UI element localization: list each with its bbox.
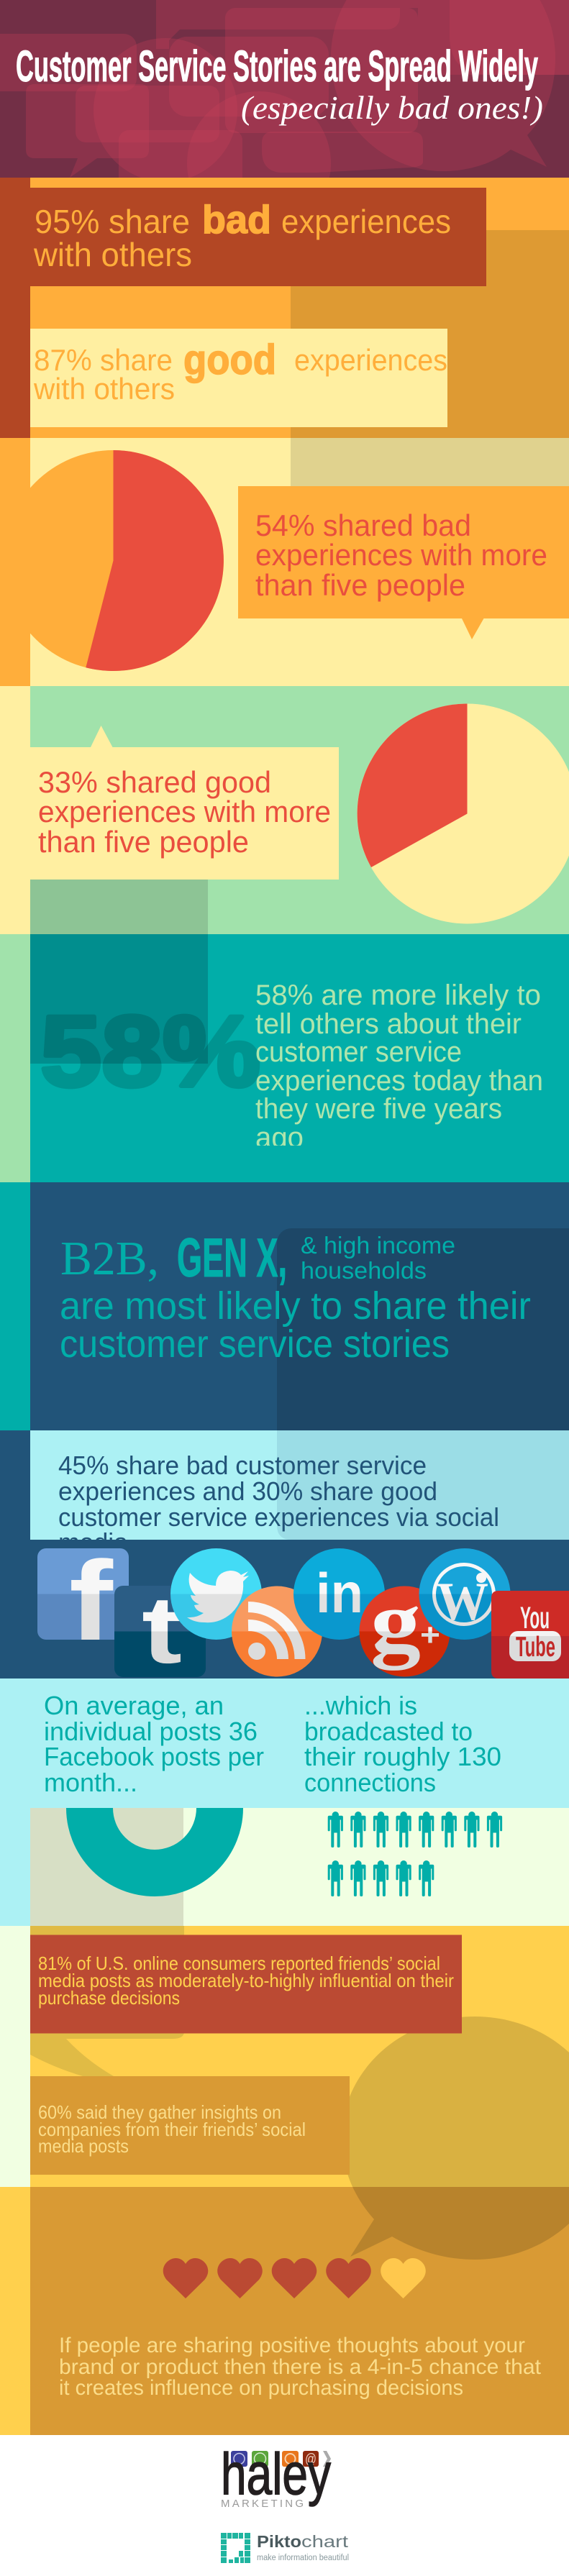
text: 45% and 30%: customer service experiences via social — [58, 1502, 499, 1532]
callout: 60%: companies from their friends’ social — [38, 2119, 306, 2140]
text: 58% description: customer service — [255, 1036, 462, 1068]
callout: 95% share bad: experiences — [281, 203, 451, 240]
text: 130 connections — [304, 1691, 501, 1797]
panel: 45% via social media — [0, 1430, 569, 1684]
callout: 87% share good: 87% share — [34, 343, 173, 377]
callout: 54% text: experiences with more — [255, 538, 547, 572]
text: 4-in-5 chance: brand or product then there is a 4-in-5 chance that — [59, 2355, 542, 2379]
panel: share bad and good experiences — [0, 178, 569, 438]
logo: piktochart — [221, 2532, 349, 2563]
text: most likely to share — [60, 1284, 531, 1366]
panel: 58% more likely — [0, 934, 569, 1182]
callout: 60% — [30, 2076, 350, 2175]
text: 58% description: they were five years — [255, 1093, 502, 1125]
callout: 54% text: than five people — [255, 568, 465, 602]
logo: piktochart: make information beautiful — [257, 2554, 349, 2562]
callout: 81%: 81% of U.S. online consumers reported friends’ social — [38, 1952, 440, 1974]
speech bubble background — [342, 2017, 569, 2260]
heading: audience segments: households — [301, 1257, 427, 1284]
heading: audience segments: B2B, — [60, 1232, 159, 1285]
callout: 33% text: 33% shared good — [38, 765, 271, 799]
text: 45% and 30%: experiences and 30% share good — [58, 1476, 437, 1506]
icon: tumblr: t — [142, 1577, 182, 1684]
text: 130 connections: ...which is — [304, 1691, 417, 1720]
text: 130 connections: connections — [304, 1768, 436, 1797]
icon: wordpress — [419, 1548, 511, 1640]
text: 4-in-5 chance — [59, 2334, 542, 2400]
panel: 33% shared good — [0, 686, 569, 934]
text: 45% and 30% — [58, 1451, 499, 1557]
icon: google plus: + — [420, 1617, 440, 1653]
callout: 60%: 60% said they gather insights on — [38, 2101, 281, 2123]
icon: youtube — [491, 1591, 569, 1678]
subtitle: (especially bad ones!) — [241, 89, 543, 126]
callout: 81% — [30, 1935, 462, 2034]
callout: 81%: purchase decisions — [38, 1987, 180, 2009]
text: 58% description: experiences today than — [255, 1065, 543, 1097]
text: 58% description: 58% are more likely to — [255, 979, 541, 1011]
callout: 95% share bad — [30, 188, 486, 286]
text: 58% description: ago — [255, 1122, 304, 1154]
icon: tumblr — [114, 1577, 206, 1684]
callout: 33% text: than five people — [38, 825, 249, 859]
callout: 60%: media posts — [38, 2135, 129, 2157]
pie chart: 33% — [357, 703, 569, 923]
icon: facebook: f — [69, 1538, 114, 1664]
icon: linkedin: in — [316, 1561, 363, 1625]
text: 36 posts per month: On average, an — [44, 1691, 224, 1720]
text: 4-in-5 chance: If people are sharing positive thoughts about your — [59, 2334, 525, 2357]
callout: 87% share good: experiences — [294, 343, 447, 377]
icon: google plus: g — [370, 1574, 421, 1671]
callout: 95% share bad: bad — [202, 197, 271, 242]
panel: influence on purchase decisions — [0, 1926, 569, 2435]
logo: piktochart: chart — [301, 2532, 349, 2551]
callout: 54% text: 54% shared bad — [255, 508, 471, 542]
callout: 54% text — [238, 486, 569, 639]
text: 36 posts per month: Facebook posts per — [44, 1742, 264, 1771]
callout: 33% text: experiences with more — [38, 795, 331, 828]
icon: rss — [232, 1586, 322, 1677]
heading: audience segments: GEN X, — [177, 1228, 287, 1289]
text: most likely to share: are most likely to share their — [60, 1284, 531, 1328]
text: 58% description — [255, 979, 543, 1154]
callout: 95% share bad: with others — [33, 236, 192, 273]
icons: people — [328, 1812, 502, 1896]
text: most likely to share: customer service stories — [60, 1323, 450, 1366]
text: 36 posts per month — [44, 1691, 264, 1797]
big number 58%: 58% — [40, 995, 260, 1107]
text: 58% description: tell others about their — [255, 1008, 522, 1040]
text: 45% and 30%: 45% share bad customer service — [58, 1451, 427, 1480]
donut chart — [89, 1743, 220, 1873]
panel: posts and connections — [0, 1678, 569, 1926]
logo: haley marketing: haley — [221, 2442, 331, 2507]
text: 36 posts per month: month... — [44, 1768, 137, 1797]
icon: linkedin — [293, 1548, 385, 1640]
icon: twitter — [170, 1548, 262, 1640]
icon: wordpress: W — [437, 1572, 488, 1632]
heading: audience segments: & high income — [301, 1232, 455, 1259]
logo: piktochart: Pikto — [257, 2532, 301, 2551]
callout: 95% share bad: 95% share — [35, 203, 190, 240]
text: 4-in-5 chance: it creates influence on purchasing decisions — [59, 2376, 463, 2400]
callout: 87% share good: good — [183, 337, 276, 383]
text: 45% and 30%: media — [58, 1527, 129, 1557]
icon: google plus — [360, 1586, 450, 1677]
panel: B2B, Gen X — [0, 1182, 569, 1444]
icon: facebook — [37, 1538, 129, 1664]
logo: haley marketing: MARKETING — [221, 2498, 304, 2510]
icons: hearts 4 in 5 — [163, 2258, 426, 2298]
text: 130 connections: their roughly 130 — [304, 1742, 501, 1771]
pie chart: 54% — [30, 450, 224, 671]
logo: haley marketing: @ — [305, 2452, 317, 2467]
panel: 54% shared bad — [0, 438, 569, 686]
text: 36 posts per month: individual posts 36 — [44, 1717, 258, 1746]
text: 130 connections: broadcasted to — [304, 1717, 473, 1746]
callout: 81%: media posts as moderately-to-highly influential on their — [38, 1970, 454, 1991]
callout: 33% text — [30, 726, 339, 880]
heading: audience segments — [60, 1228, 455, 1289]
callout: 87% share good — [30, 329, 447, 427]
panel: header — [0, 0, 569, 178]
callout: 87% share good: with others — [33, 372, 175, 406]
